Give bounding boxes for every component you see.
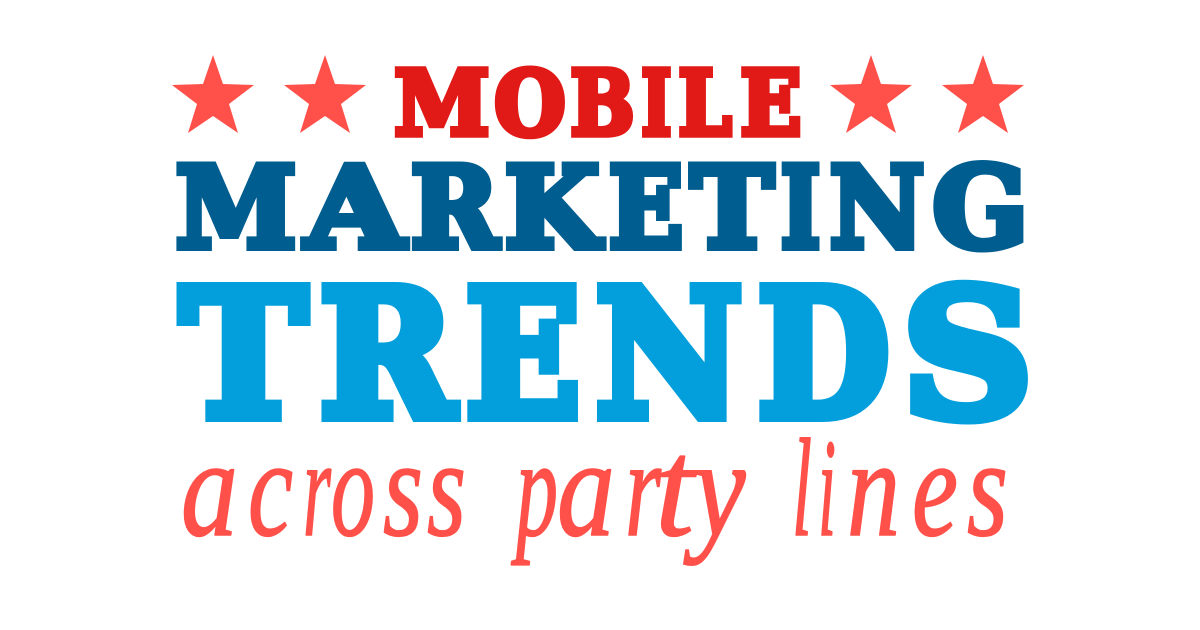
heading: MARKETING: T [691,144,773,274]
heading: TRENDS: N [595,252,743,458]
heading: MARKETING: N [830,144,924,274]
subtitle: across party lines: s [383,411,423,566]
heading: MARKETING: I [781,144,820,274]
subtitle: across party lines: l [792,411,812,566]
heading: TRENDS: E [465,252,581,458]
heading: TRENDS: T [180,252,307,458]
icon: stars right [830,55,1024,133]
heading: TRENDS: S [902,252,1033,458]
heading: MOBILE: B [570,52,634,156]
heading: MOBILE: M [394,52,490,156]
subtitle: across party lines: n [847,411,900,566]
heading: MARKETING: K [505,144,603,274]
subtitle: across party lines: p [511,411,558,566]
heading: MOBILE: I [641,52,672,156]
icon: stars left [172,55,366,133]
subtitle: across party lines: e [912,411,958,566]
heading: MOBILE: L [678,52,732,156]
subtitle: across party lines: s [967,411,1008,566]
subtitle: across party lines: c [248,411,293,566]
heading: TRENDS: D [757,252,890,458]
heading: TRENDS: R [319,252,456,458]
heading: MARKETING: G [933,144,1028,274]
subtitle: across party lines: a [557,411,615,566]
heading: MOBILE: E [740,52,802,156]
heading: MARKETING: E [609,144,683,274]
subtitle: across party lines: t [655,411,697,566]
subtitle: across party lines: y [683,411,746,566]
heading: MARKETING: A [305,144,406,274]
subtitle: across party lines: r [625,411,661,566]
subtitle: across party lines: a [181,411,238,566]
subtitle: across party lines: i [818,411,836,566]
heading: MARKETING: R [411,144,499,274]
heading: MARKETING: M [176,144,296,274]
subtitle: across party lines: r [303,411,331,566]
heading: MOBILE: O [494,52,566,156]
subtitle: across party lines: s [427,411,466,566]
subtitle: across party lines: o [331,411,375,566]
